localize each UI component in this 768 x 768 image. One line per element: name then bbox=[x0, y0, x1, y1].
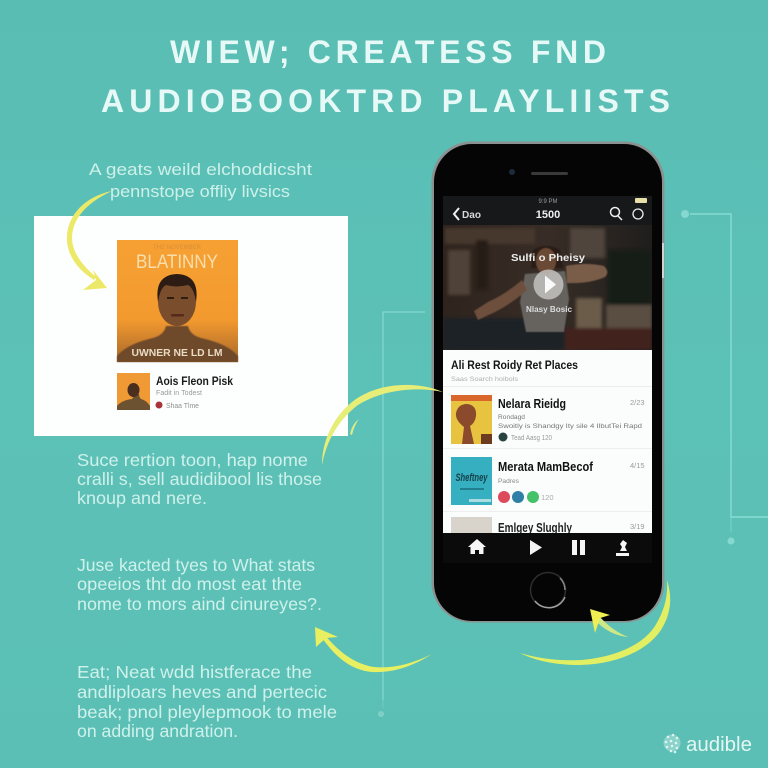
icon: share bbox=[616, 540, 629, 556]
text block 1: Suce rertion toon, hap nome bbox=[77, 450, 308, 470]
text block 1: knoup and nere. bbox=[77, 488, 207, 508]
text block 2: Juse kacted tyes to What stats bbox=[77, 555, 315, 575]
arrow: card to playlist bbox=[322, 385, 443, 465]
list row 1: Rondagd bbox=[498, 414, 525, 421]
playlist panel bbox=[443, 350, 652, 537]
small thumbnail bbox=[117, 373, 150, 410]
book cover: THE NOVEMBER bbox=[153, 245, 202, 251]
list row 2: Padres bbox=[498, 478, 520, 485]
connector line: right bbox=[681, 210, 768, 544]
wordmark: audible bbox=[686, 734, 752, 756]
list row 1 bbox=[451, 395, 645, 444]
icon: play bbox=[530, 540, 542, 555]
phone body bbox=[432, 142, 664, 622]
text block 3 bbox=[77, 662, 337, 741]
intro text: pennstope offliy livsics bbox=[110, 182, 290, 201]
title: WIEW; CREATESS FND bbox=[170, 34, 606, 70]
connector line: left bbox=[378, 312, 425, 717]
book cover: UWNER NE LD LM bbox=[132, 348, 222, 359]
intro text: A geats weild elchoddicsht bbox=[89, 160, 312, 179]
text block 3: andliploars heves and pertecic bbox=[77, 682, 327, 702]
title bbox=[101, 34, 670, 119]
list row 1: Nelara Rieidg bbox=[498, 396, 566, 411]
earpiece and camera bbox=[509, 169, 568, 175]
list row 2: 4/15 bbox=[630, 461, 645, 470]
audible logo bbox=[664, 734, 752, 756]
text block 2: nome to mors aind cinureyes?. bbox=[77, 594, 322, 614]
list row 2 bbox=[451, 457, 645, 505]
status and navigation bar: 1500 bbox=[536, 209, 560, 221]
book subtitle: Fadit in Todest bbox=[156, 390, 202, 397]
title: AUDIOBOOKTRD PLAYLIISTS bbox=[101, 83, 670, 119]
text block 2 bbox=[77, 555, 322, 614]
list row 2: Sheftney bbox=[456, 472, 488, 484]
list row 2: Merata MamBecof bbox=[498, 459, 594, 474]
rating badge bbox=[156, 402, 199, 410]
home button bbox=[530, 572, 566, 608]
list row 3: 3/19 bbox=[630, 522, 645, 531]
hero title: Sulfi o Pheisy bbox=[511, 252, 585, 264]
list subheading: Saas Soarch hoibols bbox=[451, 376, 519, 383]
arrow: phone base sweep bbox=[520, 580, 670, 665]
list row 1: Tead Aasg 120 bbox=[511, 435, 552, 442]
text block 3: beak; pnol pleylepmook to mele bbox=[77, 702, 337, 722]
list row 2: 120 bbox=[541, 493, 554, 502]
panel: audiobook card bbox=[34, 216, 348, 436]
play button bbox=[534, 270, 564, 300]
list row 1: Swoitly is Shandgy Ity sile 4 IlbutTei Rapd bbox=[498, 423, 642, 430]
book cover: BLATINNY bbox=[136, 252, 218, 273]
text block 3: on adding andration. bbox=[77, 721, 238, 741]
list heading: Ali Rest Roidy Ret Places bbox=[451, 358, 578, 372]
list row 3 bbox=[451, 517, 644, 533]
icon: dotted globe bbox=[664, 734, 680, 753]
hero caption: Nlasy Bosic bbox=[526, 304, 572, 314]
intro text bbox=[89, 160, 312, 201]
text block 1: cralli s, sell audidibool lis those bbox=[77, 469, 322, 489]
status and navigation bar bbox=[443, 196, 652, 225]
book cover bbox=[117, 240, 238, 362]
icon: home bbox=[468, 539, 486, 554]
arrow: phone to text block bbox=[315, 627, 432, 672]
phone bbox=[432, 142, 664, 622]
list row 3: Emlgey Slughly bbox=[498, 521, 572, 535]
arrow: intro to cover bbox=[67, 191, 112, 290]
status and navigation bar: Dao bbox=[462, 210, 481, 221]
arrow: home button bbox=[590, 609, 628, 637]
list row 1: 2/23 bbox=[630, 398, 645, 407]
rating badge: Shaa Tlme bbox=[166, 403, 199, 410]
status and navigation bar: 9:9 PM bbox=[538, 199, 558, 205]
text block 3: Eat; Neat wdd histferace the bbox=[77, 662, 312, 682]
text block 2: opeeios tht do most eat thte bbox=[77, 574, 302, 594]
book title: Aois Fleon Pisk bbox=[156, 376, 234, 388]
icon: pause bbox=[572, 540, 585, 555]
text block 1 bbox=[77, 450, 322, 508]
bottom tab bar bbox=[443, 533, 652, 563]
video hero bbox=[443, 225, 652, 350]
